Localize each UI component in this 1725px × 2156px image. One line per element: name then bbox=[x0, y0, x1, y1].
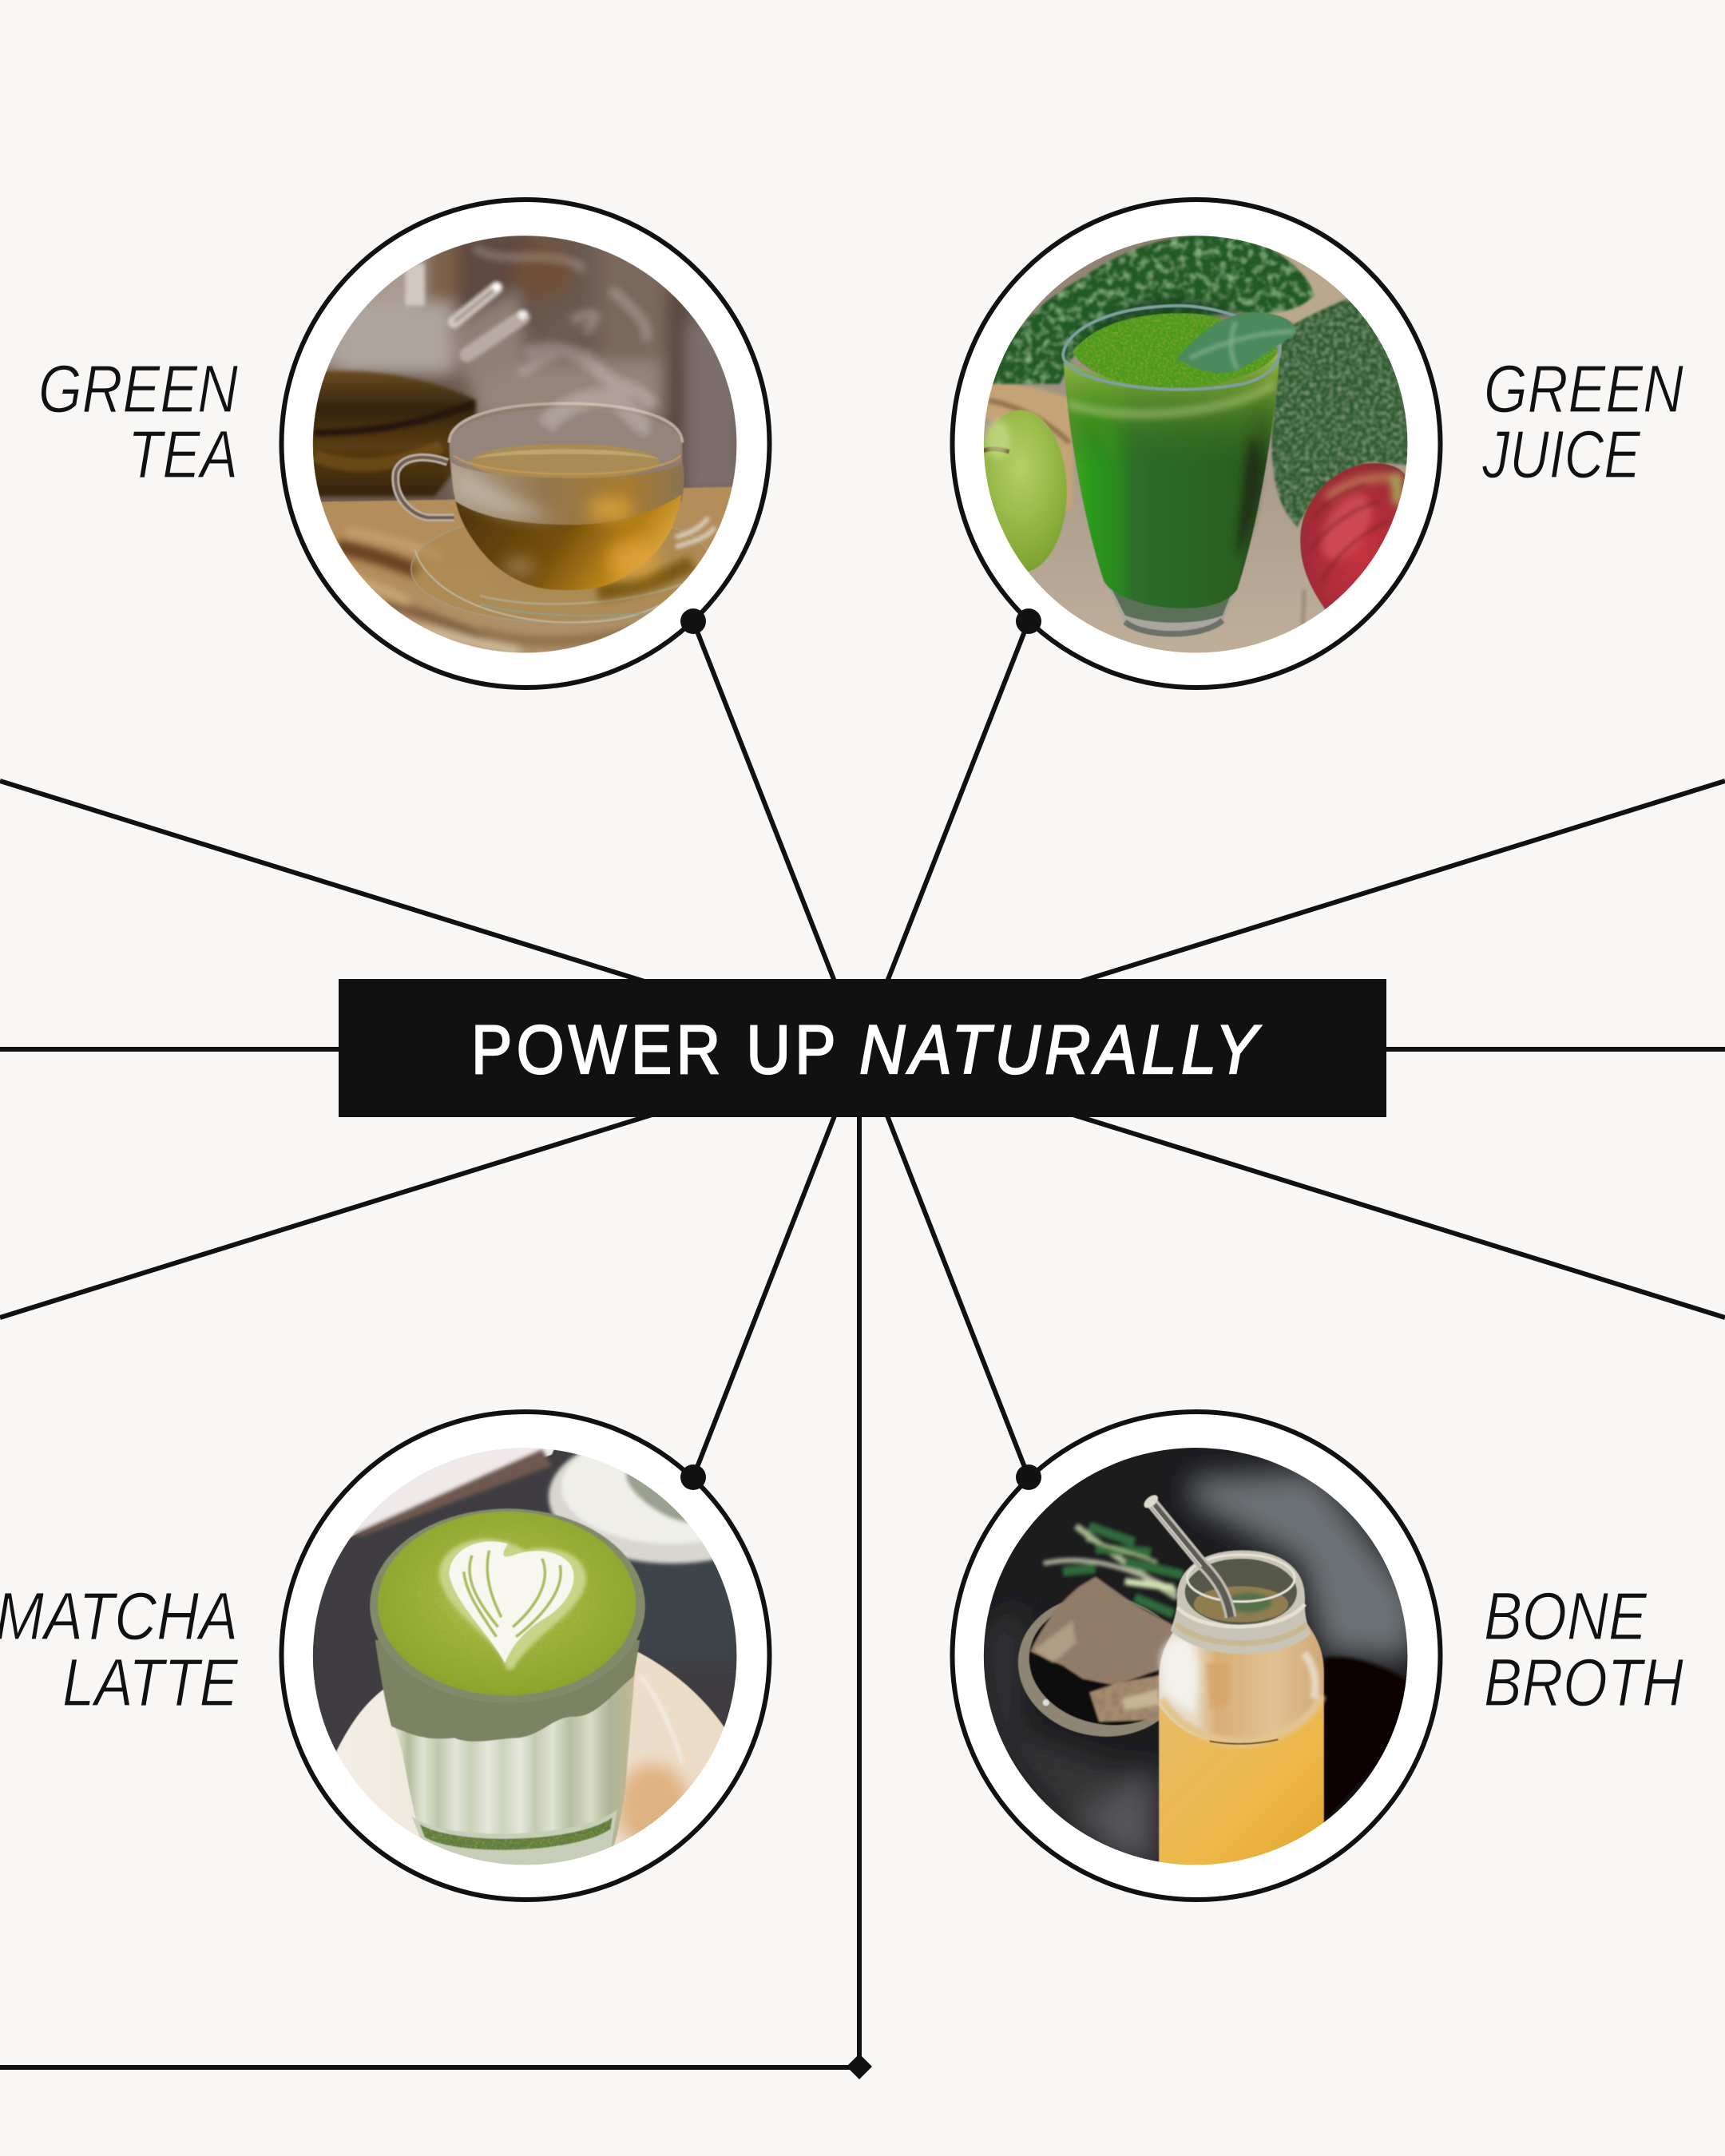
label: green juice: JUICE bbox=[1481, 417, 1641, 492]
photo: cup of green tea bbox=[313, 236, 736, 653]
steam bbox=[474, 247, 653, 426]
title text: NATURALLY bbox=[859, 1012, 1262, 1088]
thyme bbox=[1044, 1526, 1184, 1614]
jar neck bbox=[1171, 1551, 1311, 1654]
fluted glass bbox=[386, 1670, 635, 1868]
connector lines radiating from the title bar bbox=[0, 621, 1725, 1477]
apple bbox=[1300, 463, 1409, 612]
ring bbox=[952, 200, 1441, 688]
label: green tea: TEA bbox=[128, 417, 238, 492]
ring bbox=[952, 1412, 1441, 1900]
title text: POWER UP bbox=[471, 1012, 840, 1088]
glass base bbox=[1108, 588, 1234, 631]
panel: green juice bbox=[952, 200, 1441, 688]
label: green tea: GREEN bbox=[38, 351, 238, 426]
far saucer bbox=[549, 1430, 796, 1563]
connector dots bbox=[680, 608, 1041, 1490]
glass of juice bbox=[1064, 351, 1279, 608]
label: green juice: GREEN bbox=[1484, 351, 1683, 426]
jar body bbox=[1159, 1617, 1324, 1867]
broccoli bbox=[1271, 299, 1415, 527]
glass straw bbox=[1151, 1501, 1231, 1617]
pear bbox=[974, 410, 1067, 573]
panel: green tea bbox=[281, 200, 770, 688]
label: bone broth: BROTH bbox=[1484, 1645, 1683, 1720]
panel: matcha latte bbox=[281, 1412, 796, 1900]
saucer bbox=[410, 509, 715, 624]
kale bbox=[991, 234, 1314, 384]
napkin bbox=[304, 1438, 558, 1568]
near saucer bbox=[337, 1651, 724, 1869]
wooden bowl bbox=[981, 378, 1073, 511]
green layer bbox=[375, 1640, 640, 1742]
spinach leaf bbox=[1177, 312, 1296, 373]
bone meat bbox=[1029, 1576, 1177, 1722]
ring bbox=[281, 1412, 770, 1900]
photo: matcha latte with heart art bbox=[304, 1430, 796, 1894]
label: bone broth: BONE bbox=[1484, 1579, 1648, 1654]
cup bbox=[449, 403, 683, 590]
ring bbox=[281, 200, 770, 688]
handle bbox=[395, 458, 454, 517]
broth bbox=[1159, 1698, 1323, 1867]
label: matcha latte: MATCHA bbox=[0, 1579, 238, 1654]
title bar bbox=[339, 979, 1386, 1117]
heart latte art bbox=[439, 1539, 586, 1670]
juice surface bbox=[1073, 313, 1278, 389]
label: matcha latte: LATTE bbox=[62, 1645, 239, 1720]
plate bbox=[1009, 1585, 1196, 1747]
stem line and base line to diamond bbox=[0, 1110, 859, 2067]
diamond node bbox=[847, 2054, 872, 2079]
photo: jar of bone broth with straw bbox=[975, 1438, 1431, 1894]
photo: glass of green juice bbox=[984, 236, 1407, 653]
panel: bone broth bbox=[952, 1412, 1441, 1900]
blurred teapot bbox=[307, 264, 527, 497]
glass base bbox=[412, 1809, 617, 1868]
rim bbox=[370, 1508, 645, 1703]
matcha foam bbox=[378, 1512, 636, 1695]
wood table bbox=[321, 486, 732, 653]
